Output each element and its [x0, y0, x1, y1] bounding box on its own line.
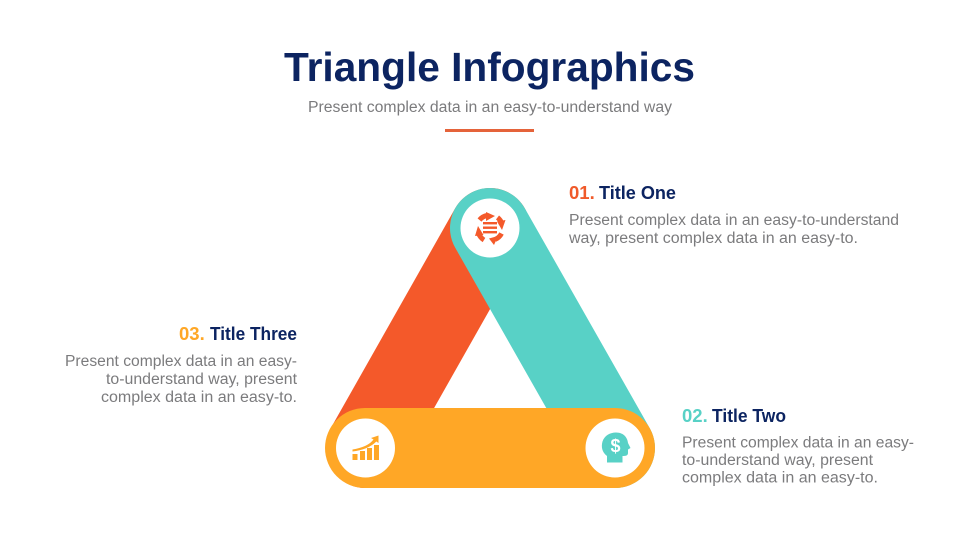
- heading 02: 02.: [682, 405, 708, 426]
- icon: head with dollar sign: [586, 418, 644, 478]
- heading 01: 01.: [569, 182, 595, 203]
- block: 01 Title One: [568, 182, 899, 247]
- heading 03: 03.: [179, 323, 205, 344]
- block: 02 Title Two: [682, 405, 914, 486]
- band: teal right side: [490, 228, 615, 448]
- heading 03: Title Three: [210, 323, 297, 344]
- body 01: way, present complex data in an easy-to.: [568, 230, 858, 247]
- body 02: to-understand way, present: [682, 452, 874, 469]
- body 03: complex data in an easy-to.: [101, 389, 297, 406]
- icon: cycle arrows with list: [460, 198, 520, 258]
- heading 02: Title Two: [712, 405, 786, 426]
- body 02: complex data in an easy-to.: [682, 470, 878, 486]
- body 01: Present complex data in an easy-to-understand: [569, 212, 899, 229]
- icon: head with dollar sign: $: [610, 436, 621, 456]
- band: orange left side: [366, 228, 490, 448]
- title: Triangle Infographics: [284, 44, 695, 90]
- body 03: Present complex data in an easy-: [65, 353, 297, 370]
- body 02: Present complex data in an easy-: [682, 434, 914, 452]
- heading 01: Title One: [599, 182, 676, 203]
- body 03: to-understand way, present: [106, 371, 298, 388]
- subtitle: Present complex data in an easy-to-understand way: [308, 99, 672, 116]
- block: 03 Title Three: [65, 323, 298, 406]
- triangle diagram: [325, 198, 655, 488]
- icon: growth chart: [336, 418, 395, 478]
- title underline: [445, 129, 534, 132]
- band: yellow base: [325, 408, 655, 488]
